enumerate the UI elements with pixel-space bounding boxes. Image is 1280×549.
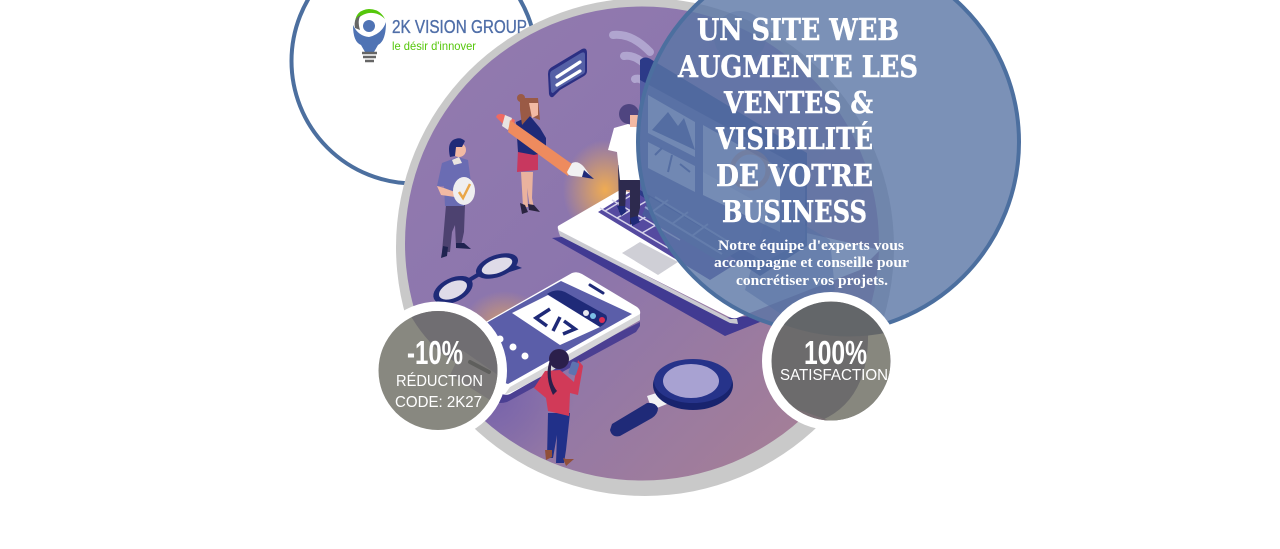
badge: -10% reduction: RÉDUCTION bbox=[396, 371, 483, 390]
laptop bbox=[552, 11, 880, 336]
figure: man holding check badge bbox=[437, 138, 475, 258]
figure: woman carrying pencil bbox=[496, 94, 594, 214]
grey ring bbox=[396, 0, 894, 496]
title: VISIBILITÉ bbox=[715, 121, 873, 157]
title: AUGMENTE LES bbox=[677, 50, 918, 85]
logo circle outline bbox=[292, 0, 536, 184]
description text: concrétiser vos projets. bbox=[736, 273, 888, 289]
badge: 100% satisfaction: SATISFACTION bbox=[780, 367, 888, 384]
title bbox=[677, 13, 918, 230]
infographic canvas bbox=[290, 0, 1021, 496]
panel: blue headline circle bbox=[638, 0, 1019, 332]
logo tagline: le désir d'innover bbox=[392, 39, 476, 53]
figure: man standing on laptop bbox=[608, 104, 640, 226]
badge: -10% reduction: -10% bbox=[407, 334, 463, 371]
icon: chat bubble bbox=[548, 48, 587, 97]
figure: woman with smartphone bbox=[534, 349, 583, 466]
purple disc bbox=[405, 6, 879, 480]
logo bbox=[353, 9, 527, 61]
description text: Notre équipe d'experts vous bbox=[718, 238, 904, 254]
description text: accompagne et conseille pour bbox=[714, 255, 909, 271]
badge: -10% reduction: CODE: 2K27 bbox=[395, 394, 482, 411]
badge: 100% satisfaction bbox=[762, 292, 900, 430]
keyboard bbox=[598, 186, 750, 280]
icon: wifi arcs bbox=[613, 35, 650, 85]
description text bbox=[714, 238, 909, 289]
logo name: 2K VISION GROUP bbox=[392, 17, 527, 37]
title: BUSINESS bbox=[722, 195, 867, 230]
illustration circle bbox=[396, 0, 894, 496]
glasses bbox=[429, 248, 522, 310]
phone bbox=[440, 272, 640, 403]
laptop screen bbox=[640, 58, 807, 276]
badge: -10% reduction bbox=[378, 302, 507, 430]
title: UN SITE WEB bbox=[697, 13, 899, 48]
icon: magnifying glass bbox=[610, 359, 733, 436]
icon: light bulb bbox=[353, 9, 386, 61]
badge: 100% satisfaction: 100% bbox=[804, 334, 867, 371]
title: DE VOTRE bbox=[716, 159, 873, 194]
trackpad bbox=[622, 242, 678, 275]
title: VENTES & bbox=[723, 86, 873, 121]
